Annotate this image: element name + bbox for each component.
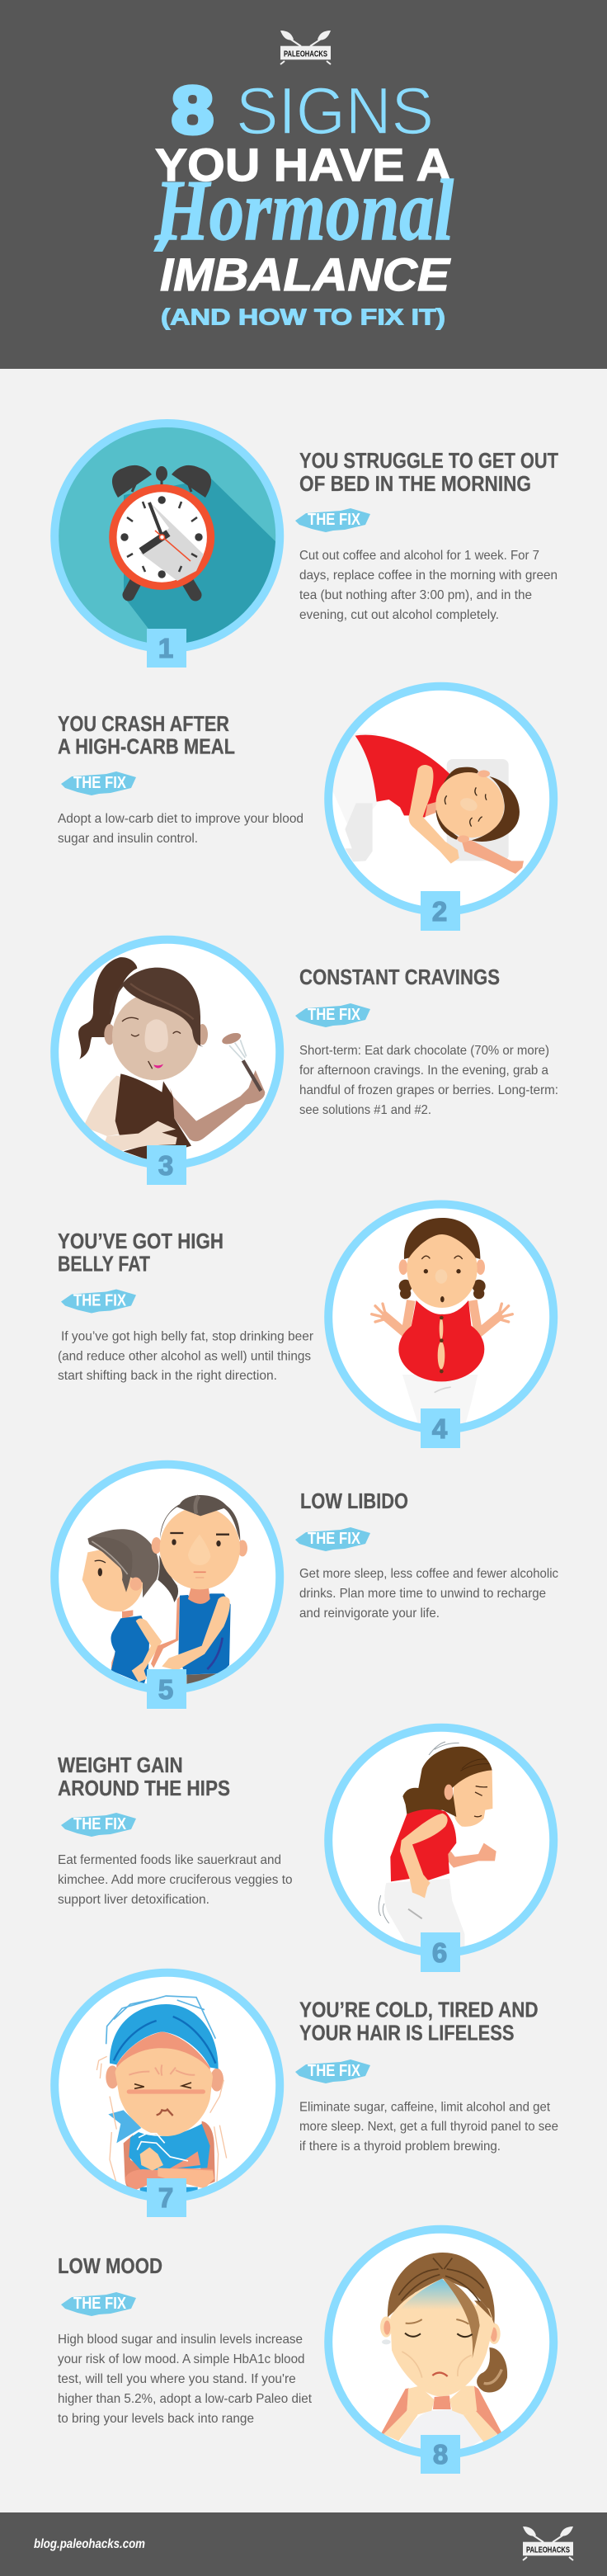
the fix badge: THE FIX [73, 774, 127, 792]
body text [58, 2333, 313, 2426]
panel: sign 1 [54, 423, 558, 668]
body text: and reinvigorate your life. [299, 1606, 440, 1621]
ring [328, 2229, 553, 2455]
the fix badge: THE FIX [308, 1006, 361, 1024]
logo: PaleoHacks [280, 31, 331, 64]
illustration: woman lying down [331, 689, 551, 909]
title: you have a: YOU HAVE A [155, 139, 451, 191]
illustration: shivering person [57, 1975, 277, 2196]
title: 8 signs: 8 [172, 73, 214, 148]
body text: days, replace coffee in the morning with green [299, 569, 558, 583]
body text: Get more sleep, less coffee and fewer alcoholic [299, 1567, 558, 1581]
panel: sign 7 [54, 1973, 558, 2217]
heading: YOUR HAIR IS LIFELESS [299, 2020, 515, 2045]
heading: LOW LIBIDO [300, 1489, 408, 1513]
heading [299, 1997, 539, 2045]
the fix badge [295, 1527, 370, 1551]
title: and how to fix it: (AND HOW TO FIX IT) [161, 304, 445, 330]
number badge 4: 4 [432, 1413, 448, 1444]
ring [54, 940, 280, 1165]
heading [299, 448, 558, 496]
the fix badge [61, 1289, 136, 1314]
heading [58, 711, 235, 759]
panel: sign 8 [58, 2229, 553, 2474]
panel: sign 2 [58, 686, 553, 931]
number badge 3: 3 [158, 1150, 173, 1181]
body text: if there is a thyroid problem brewing. [299, 2140, 501, 2154]
ring [54, 423, 280, 649]
the fix badge [61, 2292, 136, 2316]
number badge 1 [147, 629, 186, 668]
body text: test, will tell you where you stand. If you're [58, 2372, 296, 2386]
footer url: blog.paleohacks.com [34, 2537, 145, 2551]
the fix badge: THE FIX [308, 511, 361, 529]
title: imbalance: IMBALANCE [160, 248, 451, 300]
body text: more sleep. Next, get a full thyroid panel to see [299, 2120, 558, 2134]
number badge 3 [147, 1145, 186, 1185]
body text: tea (but nothing after 3:00 pm), and in the [299, 588, 532, 602]
the fix badge [61, 1813, 136, 1837]
body text: If you’ve got high belly fat, stop drinking beer [61, 1330, 314, 1343]
ring [328, 1205, 553, 1429]
number badge 5: 5 [158, 1674, 173, 1705]
ring [54, 1465, 280, 1690]
body text: higher than 5.2%, adopt a low-carb Paleo diet [58, 2392, 313, 2406]
heading: YOU’VE GOT HIGH [58, 1229, 224, 1253]
body text: High blood sugar and insulin levels increase [58, 2333, 303, 2347]
heading: YOU’RE COLD, TIRED AND [299, 1997, 539, 2022]
panel: sign 4 [58, 1205, 553, 1448]
the fix badge: THE FIX [73, 1815, 127, 1833]
heading [58, 1753, 230, 1800]
body text: drinks. Plan more time to unwind to recharge [299, 1587, 546, 1601]
number badge 6 [421, 1932, 460, 1972]
the fix badge: THE FIX [308, 2062, 361, 2080]
the fix badge [295, 2059, 370, 2083]
the fix badge [61, 771, 136, 795]
number badge 7 [147, 2178, 186, 2217]
heading: YOU CRASH AFTER [58, 711, 229, 736]
body text: handful of frozen grapes or berries. Long-term: [299, 1083, 558, 1097]
logo: PaleoHacks [523, 2526, 573, 2560]
body text: start shifting back in the right direction. [58, 1369, 277, 1383]
ring [328, 686, 553, 912]
illustration: woman with low mood [331, 2232, 551, 2452]
body text: Eliminate sugar, caffeine, limit alcohol and get [299, 2101, 551, 2115]
number badge 8: 8 [433, 2439, 448, 2470]
body text: Eat fermented foods like sauerkraut and [58, 1853, 281, 1867]
the fix badge: THE FIX [308, 1530, 361, 1548]
body text: see solutions #1 and #2. [299, 1103, 431, 1117]
number badge 2 [421, 891, 460, 931]
body text: support liver detoxification. [58, 1893, 209, 1907]
ring [54, 1973, 280, 2198]
the fix badge [295, 508, 370, 532]
logo: PaleoHacks: PALEOHACKS [284, 49, 327, 59]
body text: Adopt a low-carb diet to improve your blood [58, 812, 304, 826]
heading: WEIGHT GAIN [58, 1753, 183, 1777]
illustration: woman from side [331, 1730, 551, 1951]
body text [58, 812, 304, 846]
body text [299, 1044, 558, 1117]
body text: your risk of low mood. A simple HbA1c blood [58, 2352, 305, 2366]
the fix badge: THE FIX [73, 2295, 127, 2313]
heading: BELLY FAT [58, 1252, 150, 1276]
title: hormonal: Hormonal [154, 162, 454, 258]
illustration: woman with belly fat [331, 1207, 551, 1427]
body text: evening, cut out alcohol completely. [299, 608, 499, 622]
heading: CONSTANT CRAVINGS [299, 965, 500, 989]
panel: sign 3 [54, 940, 558, 1185]
body text: Cut out coffee and alcohol for 1 week. For 7 [299, 549, 539, 563]
illustration: couple [57, 1467, 277, 1687]
logo: PaleoHacks: PALEOHACKS [526, 2545, 570, 2555]
body text: kimchee. Add more cruciferous veggies to [58, 1873, 293, 1887]
body text: sugar and insulin control. [58, 832, 198, 846]
number badge 2: 2 [432, 896, 447, 927]
body text [58, 1853, 293, 1907]
panel: sign 6 [58, 1728, 553, 1972]
title: 8 signs: SIGNS [236, 74, 434, 149]
heading: YOU STRUGGLE TO GET OUT [299, 448, 558, 473]
illustration: woman with fork [57, 942, 277, 1163]
number badge 4 [421, 1408, 460, 1448]
body text: for afternoon cravings. In the evening, grab a [299, 1064, 548, 1078]
heading: OF BED IN THE MORNING [299, 471, 531, 496]
panel: footer [0, 2512, 607, 2576]
the fix badge: THE FIX [73, 1292, 127, 1310]
body text [299, 1567, 558, 1621]
heading [58, 1229, 224, 1276]
heading: LOW MOOD [58, 2253, 162, 2278]
body text: (and reduce other alcohol as well) until things [58, 1350, 311, 1363]
the fix badge [295, 1003, 370, 1027]
number badge 5 [147, 1669, 186, 1709]
body text [299, 2101, 558, 2154]
ring [328, 1728, 553, 1953]
panel: header [0, 0, 607, 369]
heading: A HIGH-CARB MEAL [58, 734, 235, 759]
body text [58, 1330, 314, 1383]
number badge 1: 1 [158, 633, 173, 663]
panel: sign 5 [54, 1465, 558, 1709]
icon: alarm clock [59, 427, 280, 660]
heading: AROUND THE HIPS [58, 1776, 230, 1800]
number badge 7: 7 [158, 2182, 173, 2213]
body text [299, 549, 558, 622]
number badge 6: 6 [432, 1937, 447, 1968]
body text: Short-term: Eat dark chocolate (70% or more) [299, 1044, 549, 1058]
number badge 8 [421, 2435, 460, 2474]
body text: to bring your levels back into range [58, 2412, 254, 2426]
